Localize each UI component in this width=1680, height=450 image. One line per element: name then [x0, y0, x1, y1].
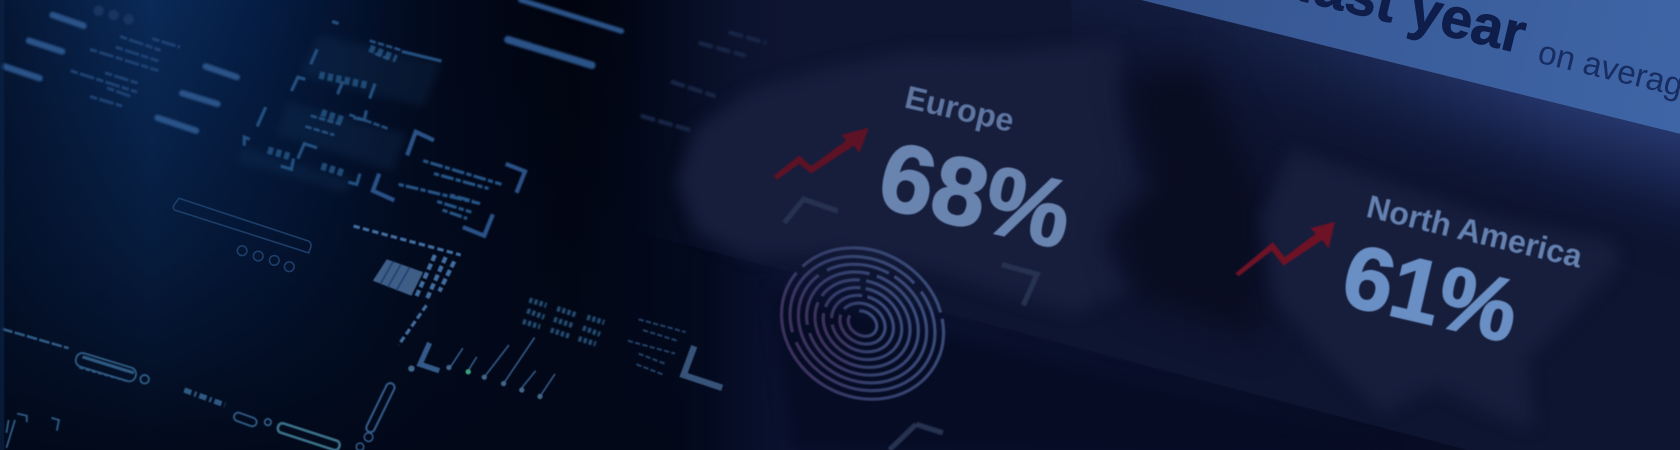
value: 68%: 68% — [870, 122, 1082, 270]
HUD: input box — [173, 198, 311, 272]
HUD: bracket frame — [373, 132, 525, 236]
icon: Europe trend arrow — [774, 128, 869, 180]
map: dark gap between continents — [1114, 64, 1264, 343]
HUD: data bars — [4, 0, 621, 131]
HUD: bottom brackets and gauge ticks — [356, 338, 555, 450]
HUD: top dots — [93, 5, 134, 25]
map screen panel — [782, 0, 1680, 450]
HUD: dense data block soft glow — [236, 34, 441, 193]
label: Europe: Europe — [902, 79, 1018, 139]
map: Europe — [677, 41, 1168, 313]
label: North America: North America — [1363, 188, 1587, 275]
HUD: bottom left controls — [2, 329, 341, 450]
corner brackets on map — [784, 199, 1037, 450]
North America stat — [1334, 188, 1587, 361]
HUD: barcode block — [354, 226, 461, 345]
left edge sheen — [0, 0, 4, 450]
HUD: frame text lines — [399, 161, 501, 219]
HUD: left text columns — [71, 36, 180, 106]
value: 61%: 61% — [1334, 225, 1526, 361]
Europe stat — [870, 79, 1082, 270]
map: North America — [1262, 150, 1620, 429]
HUD: centre text lines — [628, 319, 686, 375]
HUD: corner bracket — [684, 346, 722, 388]
HUD: dim right text lines — [641, 32, 766, 131]
top light band — [1141, 0, 1680, 134]
HUD: dense data block with brackets — [244, 21, 441, 184]
HUD: four small circles — [237, 246, 294, 272]
icon: fingerprint — [754, 219, 971, 428]
icon: North America trend arrow — [1235, 222, 1335, 276]
HUD: centre small panels — [523, 300, 604, 344]
band heading — [1293, 0, 1680, 109]
